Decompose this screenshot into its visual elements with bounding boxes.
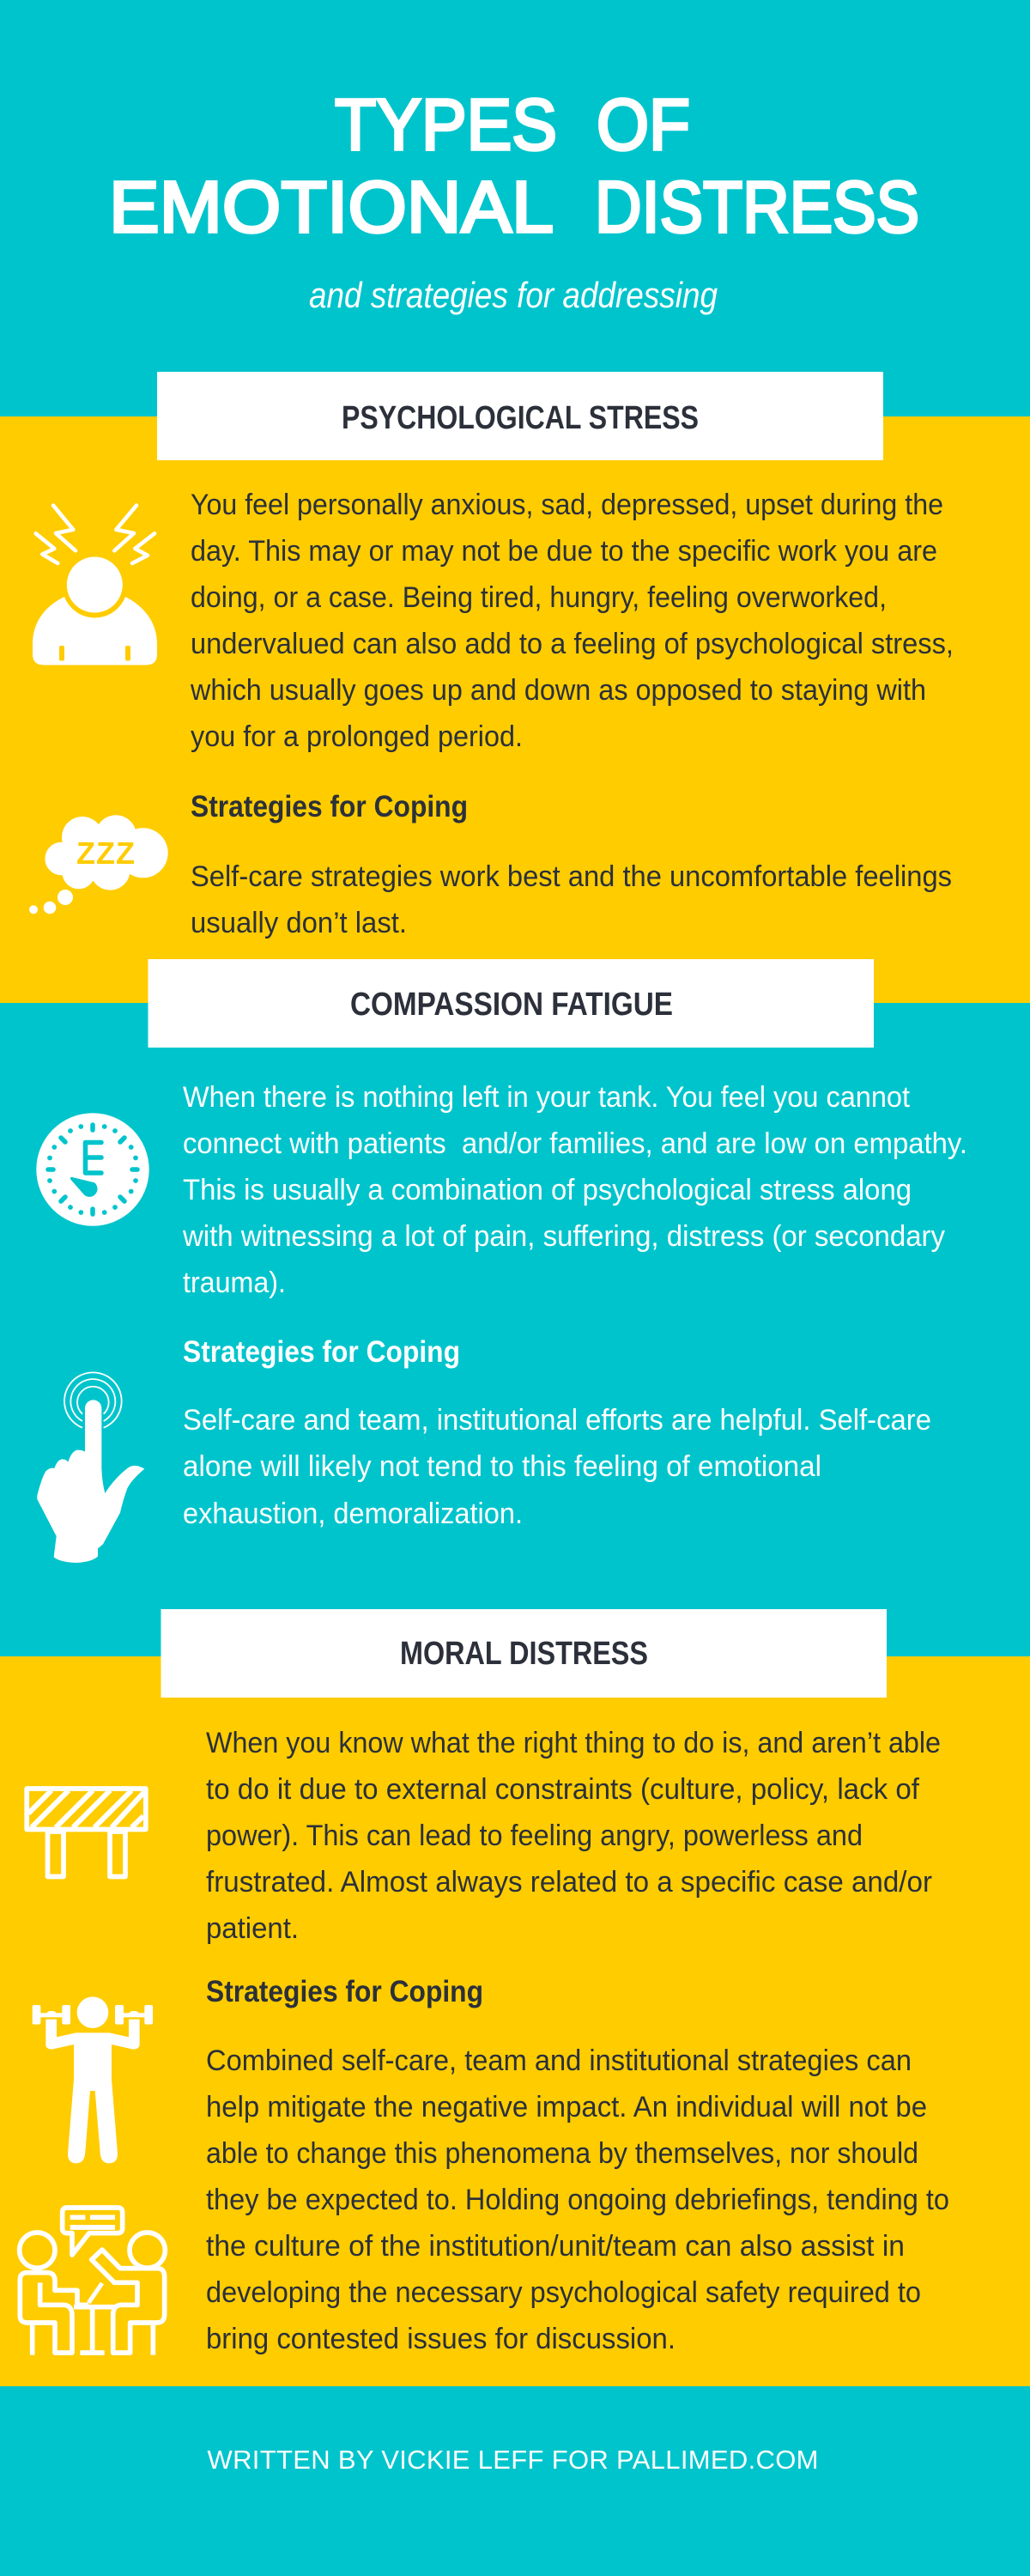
- title: DISTRESS: [595, 167, 919, 247]
- text: psychological stress description: doing, or a case. Being tired, hungry, feeling overworked,: [191, 581, 887, 614]
- text: coping strategies 3: bring contested issues for discussion.: [206, 2323, 676, 2355]
- subtitle: and strategies for addressing: [309, 275, 718, 315]
- text: moral distress description: frustrated. Almost always related to a specific case and/or: [206, 1866, 932, 1899]
- text: moral distress description: When you know what the right thing to do is, and aren’t able: [206, 1727, 941, 1759]
- icon: two people talking at a table: [20, 2208, 165, 2355]
- title: EMOTIONAL: [109, 167, 554, 247]
- icon: sleep thought cloud: ZZZ: [76, 835, 135, 871]
- text: psychological stress description: which usually goes up and down as opposed to staying with: [190, 674, 926, 707]
- text: moral distress description: power). This can lead to feeling angry, powerless and: [206, 1820, 863, 1852]
- heading: psychological stress: PSYCHOLOGICAL STRESS: [342, 400, 699, 436]
- icon: hand touching with signal rings: [37, 1372, 144, 1563]
- text: compassion fatigue description: connect with patients and/or families, and are low on empathy.: [183, 1127, 967, 1160]
- panel: header background: [0, 0, 1030, 416]
- text: psychological stress description: [190, 489, 954, 753]
- text: coping strategies 2: [183, 1404, 931, 1530]
- subheading: strategies for coping 1: Strategies for Coping: [191, 790, 468, 823]
- text: psychological stress description: you for a prolonged period.: [191, 720, 523, 753]
- text: psychological stress description: You feel personally anxious, sad, depressed, upset during the: [191, 489, 943, 521]
- footer credit: WRITTEN BY VICKIE LEFF FOR PALLIMED.COM: [208, 2445, 819, 2475]
- text: psychological stress description: undervalued can also add to a feeling of psychological stress,: [191, 628, 954, 660]
- title: OF: [597, 84, 690, 165]
- text: coping strategies 1: usually don’t last.: [191, 907, 407, 939]
- text: coping strategies 3: help mitigate the negative impact. An individual will not be: [206, 2091, 927, 2123]
- subheading: strategies for coping 3: Strategies for Coping: [206, 1975, 483, 2008]
- title: TYPES: [335, 84, 557, 165]
- panel: psychological stress background: [0, 416, 1030, 1003]
- text: moral distress description: to do it due to external constraints (culture, policy, lack of: [206, 1773, 920, 1806]
- text: compassion fatigue description: When there is nothing left in your tank. You feel you cannot: [183, 1081, 911, 1114]
- heading: moral distress: MORAL DISTRESS: [400, 1636, 648, 1672]
- text: coping strategies 3: they be expected to. Holding ongoing debriefings, tending to: [206, 2184, 949, 2216]
- heading: moral distress: [161, 1609, 887, 1698]
- panel: footer background: [0, 2386, 1030, 2576]
- text: coping strategies 3: developing the necessary psychological safety required to: [206, 2276, 921, 2309]
- icon: person lifting dumbbells: [33, 1996, 153, 2163]
- text: compassion fatigue description: This is usually a combination of psychological stress along: [183, 1174, 912, 1206]
- heading: compassion fatigue: COMPASSION FATIGUE: [350, 987, 673, 1023]
- text: coping strategies 3: the culture of the institution/unit/team can also assist in: [206, 2230, 905, 2263]
- panel: compassion fatigue background: [0, 1003, 1030, 1656]
- text: compassion fatigue description: [182, 1081, 967, 1299]
- text: coping strategies 3: able to change this phenomena by themselves, nor should: [206, 2137, 918, 2170]
- text: coping strategies 2: Self-care and team, institutional efforts are helpful. Self-care: [183, 1404, 931, 1437]
- heading: psychological stress: [157, 372, 883, 460]
- subheading: strategies for coping 2: Strategies for Coping: [183, 1335, 460, 1369]
- text: coping strategies 3: Combined self-care, team and institutional strategies can: [206, 2044, 912, 2077]
- text: coping strategies 2: exhaustion, demoralization.: [183, 1498, 523, 1530]
- icon: empty fuel gauge: [36, 1113, 149, 1226]
- text: compassion fatigue description: trauma).: [183, 1267, 286, 1299]
- text: coping strategies 1: Self-care strategies work best and the uncomfortable feelings: [191, 860, 952, 893]
- icon: sleep thought cloud: [29, 815, 168, 914]
- text: coping strategies 1: [191, 860, 952, 939]
- text: moral distress description: patient.: [206, 1912, 299, 1945]
- text: coping strategies 2: alone will likely not tend to this feeling of emotional: [183, 1450, 821, 1483]
- text: compassion fatigue description: with witnessing a lot of pain, suffering, distress (or secondary: [182, 1220, 945, 1253]
- icon: road barrier: [27, 1789, 146, 1877]
- panel: moral distress background: [0, 1656, 1030, 2386]
- text: psychological stress description: day. This may or may not be due to the specific work you are: [191, 535, 937, 568]
- text: coping strategies 3: [206, 2044, 949, 2355]
- icon: stressed person: [33, 506, 157, 665]
- heading: compassion fatigue: [148, 959, 874, 1048]
- text: moral distress description: [206, 1727, 941, 1945]
- title: [109, 84, 919, 247]
